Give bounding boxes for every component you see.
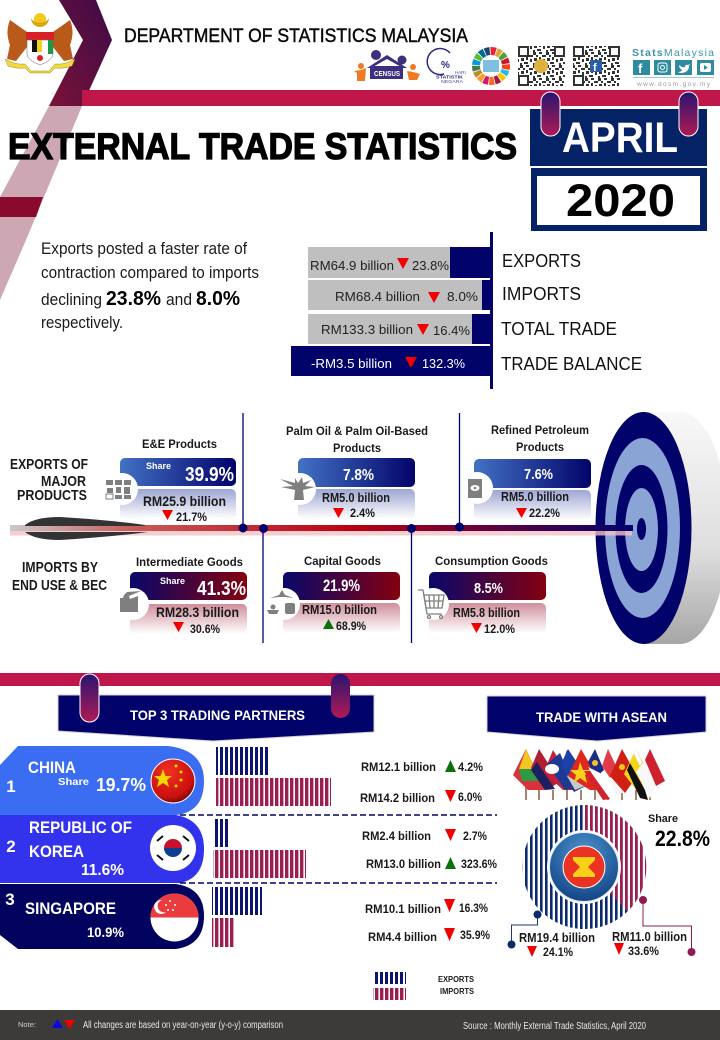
- target: [596, 412, 720, 644]
- partner values: 35.9%: [460, 928, 490, 942]
- legend: IMPORTS: [440, 987, 475, 996]
- ASEAN share: Share: [648, 813, 678, 825]
- background chevron ribbon: [0, 0, 112, 300]
- chart: overview trade bars: 16.4%: [433, 323, 470, 338]
- summary text: [41, 239, 259, 332]
- logo: StatsMalaysia social: [632, 47, 714, 88]
- partner values: [360, 760, 497, 944]
- card: capital goods: 68.9%: [336, 619, 366, 633]
- partner: China: CHINA: [28, 758, 76, 777]
- card: capital goods: RM15.0 billion: [302, 603, 377, 617]
- banner: trade with ASEAN: TRADE WITH ASEAN: [536, 710, 667, 725]
- section red bar: [0, 673, 720, 686]
- callout: ASEAN exports: 24.1%: [543, 945, 573, 959]
- partner: Republic of Korea: 2: [6, 837, 16, 856]
- icon: palm tree: [280, 477, 315, 500]
- card: consumption goods: RM5.8 billion: [453, 606, 520, 620]
- card: consumption goods: [417, 554, 548, 636]
- calendar: 2020: [531, 168, 707, 231]
- summary text: 23.8%: [106, 288, 161, 310]
- summary text: contraction compared to imports: [41, 263, 259, 282]
- callout: ASEAN imports: 33.6%: [628, 944, 659, 958]
- card: intermediate goods: Share: [160, 576, 185, 586]
- partner values: 4.2%: [458, 760, 483, 774]
- partner: China: 1: [6, 777, 16, 796]
- partner values: RM4.4 billion: [368, 930, 437, 944]
- logo: hari statistik negara: STATISTIK: [436, 74, 464, 80]
- chart: overview trade bars: [291, 232, 642, 389]
- partner: Singapore: 3: [5, 890, 15, 909]
- card: intermediate goods: 30.6%: [190, 622, 220, 636]
- legend: EXPORTS: [438, 975, 475, 984]
- calendar: April: [530, 92, 707, 166]
- chart: ASEAN donut: [522, 805, 646, 929]
- card: refined petroleum: RM5.0 billion: [501, 490, 569, 504]
- calendar: April: APRIL: [562, 114, 678, 162]
- card: E&E products: E&E Products: [142, 437, 217, 451]
- heading: exports of major products: PRODUCTS: [17, 487, 87, 504]
- summary text: and: [166, 290, 192, 309]
- partner: Republic of Korea: KOREA: [29, 842, 84, 861]
- card: palm oil: 2.4%: [350, 506, 375, 520]
- partner values: 16.3%: [459, 901, 488, 915]
- title: EXTERNAL TRADE STATISTICS: [8, 126, 517, 167]
- partner: China: 19.7%: [96, 775, 146, 795]
- partner values: RM2.4 billion: [362, 829, 431, 843]
- card: capital goods: [267, 554, 400, 633]
- chart: overview trade bars: 132.3%: [422, 356, 465, 371]
- partner values: 323.6%: [461, 857, 497, 871]
- icon: QR code 1: [518, 46, 565, 86]
- banner: trade with ASEAN: [487, 696, 706, 741]
- callout: ASEAN exports: RM19.4 billion: [519, 931, 595, 945]
- card: refined petroleum: [461, 423, 591, 520]
- logo: StatsMalaysia social: StatsMalaysia: [632, 47, 714, 59]
- card: E&E products: [106, 437, 236, 524]
- partner values: RM12.1 billion: [361, 760, 436, 774]
- footer: All changes are based on year-on-year (y-o-y) comparison: [83, 1020, 283, 1031]
- heading: exports of major products: EXPORTS OF: [10, 456, 88, 473]
- card: palm oil: 7.8%: [343, 467, 374, 484]
- partner values: 6.0%: [458, 790, 482, 804]
- card: refined petroleum: Products: [516, 440, 564, 454]
- card: E&E products: 21.7%: [176, 510, 207, 524]
- icon: QR code 2 with Facebook: [573, 46, 620, 86]
- card: E&E products: 39.9%: [185, 464, 234, 486]
- partner: China: Share: [58, 777, 89, 788]
- banner: top 3 trading partners: TOP 3 TRADING PARTNERS: [130, 708, 305, 723]
- icon: QR code 2 with Facebook: f: [593, 62, 597, 74]
- logo: SDG wheel: [476, 51, 506, 81]
- card: palm oil: [280, 424, 428, 520]
- heading: imports by end use: IMPORTS BY: [22, 559, 98, 576]
- card: E&E products: RM25.9 billion: [143, 493, 226, 509]
- partner: Singapore: SINGAPORE: [25, 899, 116, 918]
- footer: Source : Monthly External Trade Statistics, April 2020: [463, 1021, 646, 1032]
- callout: ASEAN imports: RM11.0 billion: [612, 930, 687, 944]
- heading: exports of major products: [10, 456, 88, 504]
- card: palm oil: Palm Oil & Palm Oil-Based: [286, 424, 428, 438]
- card: consumption goods: 12.0%: [484, 622, 515, 636]
- icon: plane ship bus: [267, 590, 295, 614]
- card: E&E products: Share: [146, 461, 171, 471]
- icon: electronics: [106, 480, 131, 499]
- legend: [373, 972, 475, 1000]
- ASEAN share: [648, 813, 710, 851]
- card: consumption goods: 8.5%: [474, 580, 503, 597]
- card: intermediate goods: 41.3%: [197, 578, 246, 600]
- logo: StatsMalaysia social: f: [638, 61, 643, 76]
- chart: overview trade bars: RM64.9 billion: [310, 258, 394, 273]
- icon: ASEAN emblem: [550, 832, 618, 902]
- partner: Singapore: 10.9%: [87, 924, 125, 940]
- logo: census: CENSUS: [374, 71, 400, 78]
- chart: overview trade bars: TRADE BALANCE: [501, 354, 642, 374]
- chart: overview trade bars: EXPORTS: [502, 251, 581, 271]
- card: intermediate goods: Intermediate Goods: [136, 555, 243, 569]
- chart: overview trade bars: RM68.4 billion: [335, 289, 420, 304]
- icon: factory: [120, 591, 141, 612]
- chart: overview trade bars: 8.0%: [447, 289, 478, 304]
- partner: Republic of Korea: REPUBLIC OF: [29, 818, 132, 837]
- logo: hari statistik negara: NEGARA: [441, 79, 463, 84]
- card: capital goods: Capital Goods: [304, 554, 381, 568]
- chart: partner trade bars: [212, 747, 331, 947]
- partner values: RM14.2 billion: [360, 791, 435, 805]
- icon: ASEAN flags: [513, 749, 665, 800]
- arrow shaft and fletching: [10, 517, 633, 540]
- chart: overview trade bars: RM133.3 billion: [321, 322, 413, 337]
- heading: exports of major products: MAJOR: [41, 473, 86, 490]
- summary text: respectively.: [41, 313, 123, 332]
- ASEAN share: 22.8%: [655, 826, 710, 851]
- dashed separators: [180, 815, 497, 883]
- card: capital goods: 21.9%: [323, 576, 360, 595]
- heading: imports by end use: END USE & BEC: [12, 577, 107, 594]
- logo: census: [354, 50, 420, 81]
- icon: China flag: [151, 759, 195, 803]
- callout: ASEAN exports: [508, 910, 595, 959]
- card: palm oil: RM5.0 billion: [322, 491, 390, 505]
- logo: StatsMalaysia social: www.dosm.gov.my: [636, 81, 711, 88]
- heading: imports by end use: [12, 559, 107, 594]
- partner: China: [0, 746, 204, 815]
- partner values: RM13.0 billion: [366, 857, 441, 871]
- icon: oil drum: [468, 479, 482, 498]
- card: palm oil: Products: [333, 441, 381, 455]
- summary text: Exports posted a faster rate of: [41, 239, 247, 258]
- card: consumption goods: Consumption Goods: [435, 554, 548, 568]
- icon: Singapore flag: [150, 894, 198, 942]
- timeline connectors: [239, 413, 463, 643]
- department heading: DEPARTMENT OF STATISTICS MALAYSIA: [124, 25, 468, 47]
- icon: shopping cart: [418, 590, 444, 618]
- card: intermediate goods: [117, 555, 247, 636]
- chart: overview trade bars: IMPORTS: [502, 284, 581, 304]
- card: refined petroleum: Refined Petroleum: [491, 423, 589, 437]
- summary text: declining: [41, 290, 102, 309]
- logo: hari statistik negara: [427, 49, 466, 84]
- partner values: 2.7%: [463, 829, 487, 843]
- footer: [0, 1010, 720, 1040]
- card: refined petroleum: 22.2%: [529, 506, 560, 520]
- logo: hari statistik negara: HARI: [455, 70, 466, 75]
- calendar: 2020: 2020: [566, 175, 675, 226]
- chart: overview trade bars: -RM3.5 billion: [311, 356, 392, 371]
- partner: Singapore: [0, 884, 204, 949]
- footer: Note:: [18, 1020, 36, 1029]
- callout: ASEAN imports: [612, 896, 696, 958]
- icon: Korea flag: [150, 825, 196, 871]
- top red bar: [82, 90, 720, 106]
- partner values: RM10.1 billion: [365, 902, 441, 916]
- card: intermediate goods: RM28.3 billion: [156, 604, 239, 620]
- chart: overview trade bars: 23.8%: [412, 258, 449, 273]
- partner: Republic of Korea: [0, 815, 204, 883]
- chart: overview trade bars: TOTAL TRADE: [501, 319, 617, 339]
- summary text: 8.0%: [196, 288, 240, 310]
- card: refined petroleum: 7.6%: [524, 466, 553, 483]
- logo: hari statistik negara: %: [441, 60, 450, 71]
- partner: Republic of Korea: 11.6%: [81, 862, 124, 879]
- icon: Malaysia coat of arms: [5, 13, 75, 73]
- banner: top 3 trading partners: [58, 674, 374, 741]
